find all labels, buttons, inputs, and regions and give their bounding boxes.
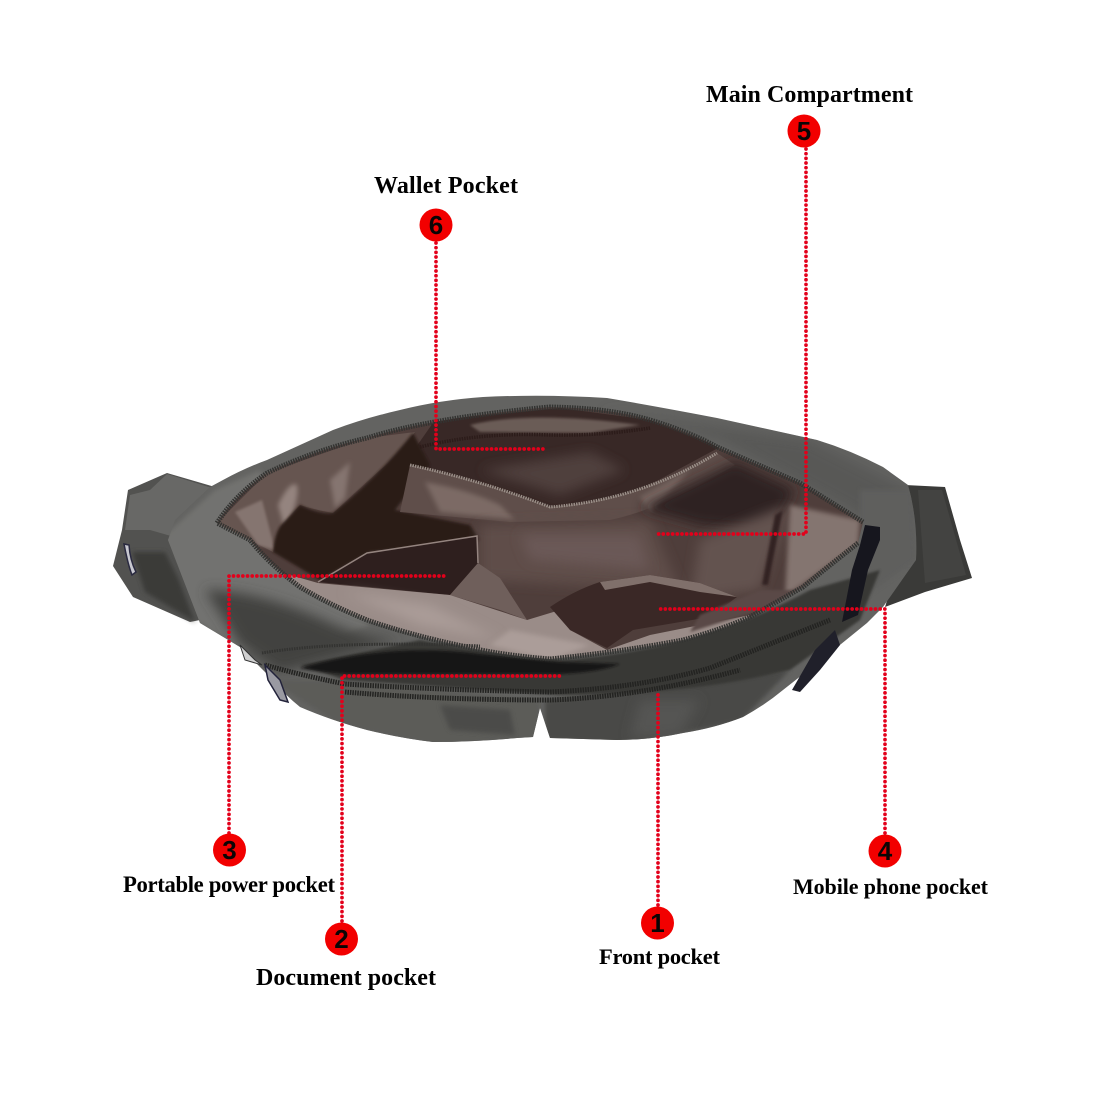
bag body [160,390,930,750]
label: front pocket: Front pocket [599,944,720,969]
number badge 1 [641,906,674,940]
pocket: mobile phone [550,575,737,648]
number badge 1: 1 [650,908,665,938]
dark left cavity [273,433,480,580]
label: wallet pocket: Wallet Pocket [374,173,518,199]
number badge 4 [868,834,902,868]
number badge 6: 6 [429,210,443,240]
number badge 6 [420,208,452,242]
label: document pocket: Document pocket [256,965,436,991]
lower lining light [290,575,750,659]
main compartment back wall [480,520,680,590]
callout 6: wallet pocket [374,173,544,449]
pocket: portable power [318,536,478,595]
zipper pulls [240,525,880,702]
label: portable power pocket: Portable power pocket [123,872,335,897]
number badge 2 [325,922,358,956]
callout 1: front pocket [599,693,720,969]
zippers [217,407,863,700]
leader line 3 [229,576,447,833]
number badge 2: 2 [334,924,349,954]
number badge 3 [213,834,246,866]
bag photo illustration [113,390,972,750]
leader line 6 [436,243,544,449]
callout 2: document pocket [256,676,562,991]
label: main compartment: Main Compartment [706,82,913,108]
callout 3: portable power pocket [123,576,447,897]
right strap [885,485,972,607]
leader line 4 [657,609,885,833]
callout 4: mobile phone pocket [657,609,989,899]
leader line 2 [342,676,562,921]
leader line 5 [657,149,806,534]
dark pocket opening [300,650,620,674]
wallet pocket recess [400,408,720,510]
number badge 5 [788,114,820,148]
pocket fold [450,563,527,620]
upper left lining [217,432,415,552]
number badge 4: 4 [878,836,893,866]
left strap [113,473,215,622]
leader line 1 [656,693,660,905]
callout 5: main compartment [657,82,913,534]
interior lining [217,407,863,659]
number badge 3: 3 [222,835,237,865]
label: mobile phone pocket: Mobile phone pocket [793,874,989,899]
flap under zipper [400,453,735,522]
number badge 5: 5 [797,116,811,146]
